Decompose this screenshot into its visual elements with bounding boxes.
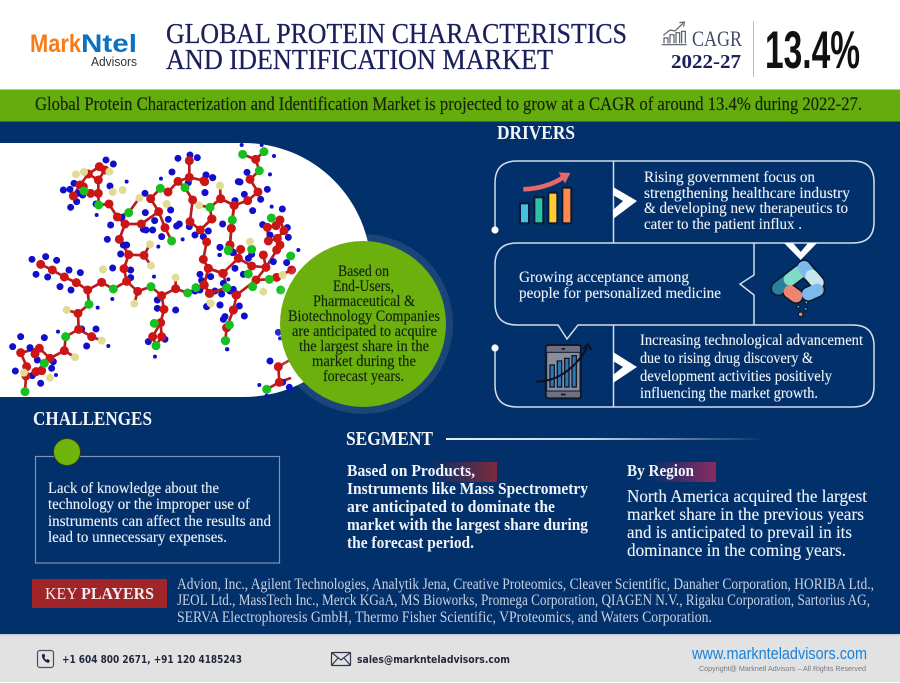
products segment text: are anticipated to dominate the <box>347 497 555 516</box>
driver 2 text: Growing acceptance among <box>519 269 689 286</box>
driver 3 text <box>640 332 864 402</box>
key players badge <box>32 579 167 608</box>
challenges text: technology or the improper use of <box>48 496 251 513</box>
icon: mail <box>332 652 350 666</box>
driver 1 text <box>644 169 850 233</box>
driver 1 text: & developing new therapeutics to <box>644 200 848 217</box>
segment heading: SEGMENT <box>346 429 433 450</box>
region text: North America acquired the largest <box>627 486 867 506</box>
logo: MarkNtel Advisors: Ntel <box>81 30 137 58</box>
chevron: driver 2 <box>784 243 817 260</box>
region highlight <box>650 462 716 482</box>
panel: drivers flow <box>491 161 874 407</box>
products segment text: the forecast period. <box>347 533 474 552</box>
green end-user callout: End-Users, <box>333 278 394 295</box>
driver 2 text: people for personalized medicine <box>519 285 721 302</box>
challenges text: lead to unnecessary expenses. <box>48 529 227 546</box>
challenges text <box>48 480 271 546</box>
icon: rising bar chart <box>520 172 571 223</box>
key players list: SERVA Electrophoresis GmbH, Thermo Fisher Scientific, VProteomics, and Waters Corporation. <box>177 609 712 626</box>
period: 2022-27 <box>671 51 741 73</box>
challenges heading: CHALLENGES <box>33 409 152 430</box>
driver 3 text: Increasing technological advancement <box>640 332 864 349</box>
green summary banner <box>0 90 900 122</box>
panel: segment <box>346 429 867 560</box>
products segment text: Instruments like Mass Spectrometry <box>347 479 589 498</box>
key players label: KEY PLAYERS <box>45 584 154 603</box>
green end-user callout: market during the <box>312 353 416 370</box>
CAGR label: CAGR <box>692 26 742 51</box>
icon: tablet chart <box>536 344 591 398</box>
region text: market share in the previous years <box>627 504 864 524</box>
green end-user callout: Based on <box>338 263 389 280</box>
driver 1 text: Rising government focus on <box>644 169 815 186</box>
icon: growth chart <box>662 22 687 45</box>
driver 3 text: due to rising drug discovery & <box>640 350 813 367</box>
icon: capsules <box>778 267 817 317</box>
region text: and is anticipated to prevail in its <box>627 522 852 542</box>
drivers heading: DRIVERS <box>497 123 575 144</box>
phone numbers: +1 604 800 2671, +91 120 4185243 <box>62 654 242 666</box>
products segment text <box>347 461 589 552</box>
CAGR callout <box>662 21 860 80</box>
website: www.marknteladvisors.com <box>691 645 867 663</box>
chevron: driver 3 <box>613 352 637 383</box>
panel: challenges <box>33 409 280 563</box>
logo: MarkNtel Advisors: Advisors <box>91 55 137 69</box>
region heading: By Region <box>627 461 694 480</box>
email: sales@marknteladvisors.com <box>357 654 510 666</box>
green end-user callout: the largest share in the <box>299 338 429 355</box>
title <box>166 19 627 76</box>
navy main background <box>0 121 900 635</box>
challenges box <box>36 456 280 563</box>
logo: MarkNtel Advisors: Mark <box>30 30 81 58</box>
green end-user callout: Pharmaceutical & <box>313 293 415 310</box>
footer bar <box>0 634 900 682</box>
products segment text: market with the largest share during <box>347 515 589 534</box>
green end-user callout: are anticipated to acquire <box>292 323 437 340</box>
products highlight <box>430 462 497 482</box>
molecule image panel <box>0 143 371 397</box>
molecule right part <box>204 145 298 396</box>
green end-user callout: forecast years. <box>323 368 404 385</box>
molecule left part <box>13 155 238 392</box>
title: AND IDENTIFICATION MARKET <box>166 45 553 76</box>
key players list <box>177 576 874 626</box>
title: GLOBAL PROTEIN CHARACTERISTICS <box>166 19 627 50</box>
challenges text: instruments can affect the results and <box>48 513 271 530</box>
driver 1 text: cater to the patient influx . <box>644 216 802 233</box>
region text: dominance in the coming years. <box>627 540 846 560</box>
region text <box>627 486 867 560</box>
chevron: driver 1 <box>613 187 637 219</box>
driver 3 text: development activities positively <box>640 368 832 385</box>
driver 2 text <box>519 269 721 302</box>
copyright: Copyright@ Marknetl Advisors – All Rights Reserved <box>699 664 866 673</box>
challenges text: Lack of knowledge about the <box>48 480 219 497</box>
logo: MarkNtel Advisors <box>30 30 137 69</box>
driver 3 text: influencing the market growth. <box>640 385 818 402</box>
panel: key players <box>32 576 874 626</box>
green end-user callout <box>273 234 453 414</box>
driver 1 text: strengthening healthcare industry <box>644 185 850 202</box>
green dot <box>54 438 80 466</box>
icon: phone <box>38 650 54 668</box>
products segment text: Based on Products, <box>347 461 475 480</box>
green end-user callout: Biotechnology Companies <box>288 308 440 325</box>
